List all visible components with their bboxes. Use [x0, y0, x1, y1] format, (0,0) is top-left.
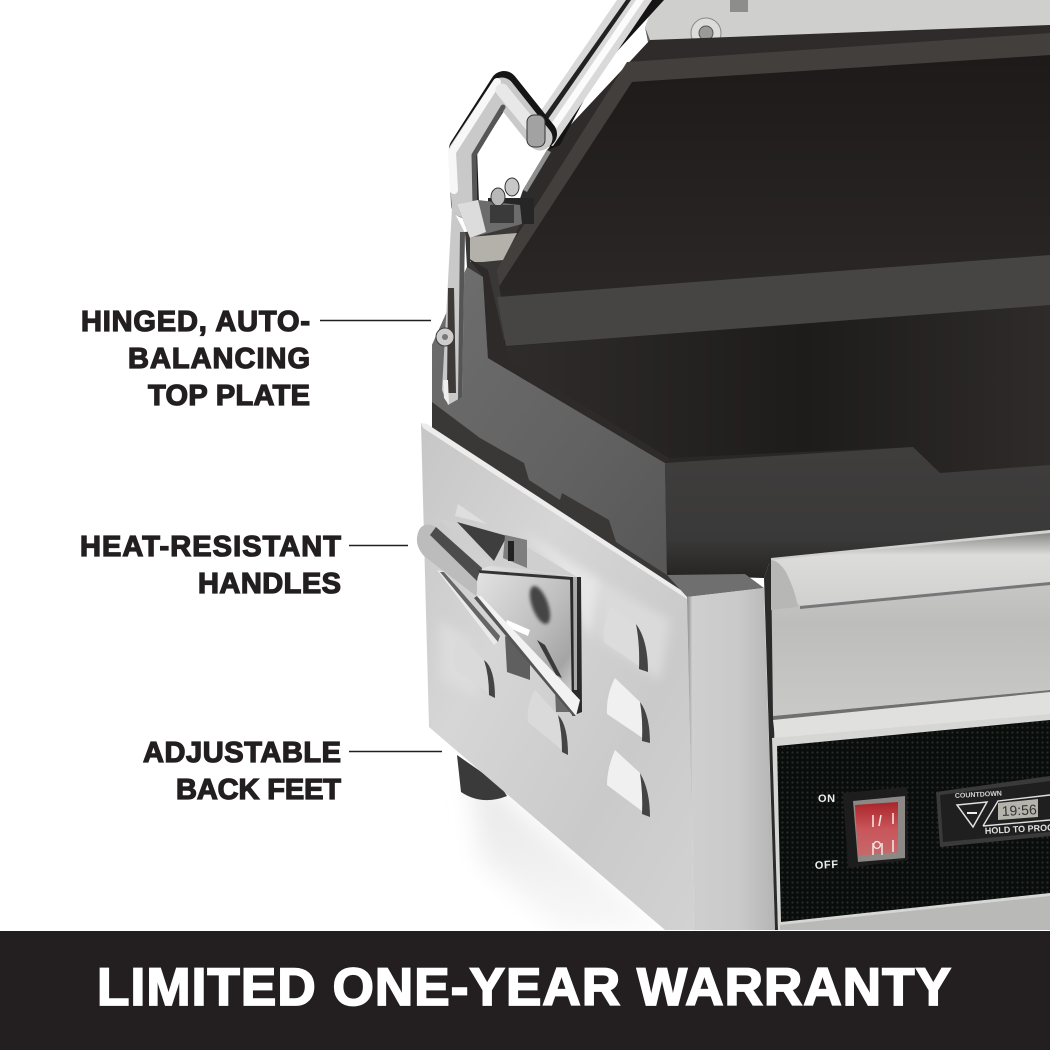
lower plate: side face	[432, 267, 667, 575]
backing behind lower plate	[480, 300, 1050, 575]
callout text: HINGED, AUTO-	[81, 306, 310, 338]
callout: back feet	[143, 737, 442, 806]
top edge of side panel	[421, 423, 687, 599]
chrome arm with slot and screw	[436, 208, 465, 405]
callout text: BACK FEET	[176, 774, 341, 806]
top hinge steel plate	[645, 0, 1050, 52]
leader line	[349, 750, 442, 752]
product: panini grill	[417, 0, 1050, 930]
upper cooking plate	[495, 25, 1050, 300]
countdown timer: 19:56	[1001, 801, 1037, 819]
chrome side handle	[417, 518, 582, 716]
control panel	[772, 714, 1050, 930]
callout text: ADJUSTABLE	[143, 737, 341, 769]
bent tube	[452, 82, 543, 205]
countdown timer: COUNTDOWN	[955, 791, 1002, 800]
floor shadow	[470, 770, 665, 930]
callout text: HEAT-RESISTANT	[80, 531, 341, 563]
lower plate: dark inner rim	[468, 258, 669, 463]
front upper steel panel	[771, 530, 1050, 738]
shelf under plate	[667, 574, 764, 597]
dark backing behind bracket and plate edge	[432, 225, 687, 597]
lower plate front lip	[665, 447, 1050, 578]
countdown timer	[936, 776, 1050, 847]
gap beside corner	[764, 558, 778, 930]
warranty text: LIMITED ONE-YEAR WARRANTY	[97, 958, 951, 1017]
stainless side panel	[421, 423, 694, 930]
foot	[457, 755, 507, 800]
hinge bolts and bracket	[457, 150, 551, 262]
side panel highlights	[444, 548, 668, 676]
rocker power switch	[843, 787, 908, 868]
on label: ON	[818, 793, 836, 805]
side vent dimples	[454, 504, 650, 817]
callout text: TOP PLATE	[148, 380, 310, 412]
callout: hinged top plate	[81, 306, 431, 412]
callout: handles	[80, 531, 408, 600]
stainless front corner	[687, 588, 775, 930]
chrome lid handle	[452, 0, 664, 205]
leader line	[349, 544, 408, 546]
lower cooking surface	[505, 303, 1050, 473]
tube joint	[527, 115, 545, 147]
off label: OFF	[815, 859, 839, 872]
callout text: BALANCING	[128, 343, 310, 375]
warranty banner	[0, 931, 1050, 1050]
leader line	[320, 320, 431, 322]
callout text: HANDLES	[198, 568, 341, 600]
rough strip on upper plate edge	[497, 255, 1050, 346]
main handle bar	[538, 0, 664, 150]
